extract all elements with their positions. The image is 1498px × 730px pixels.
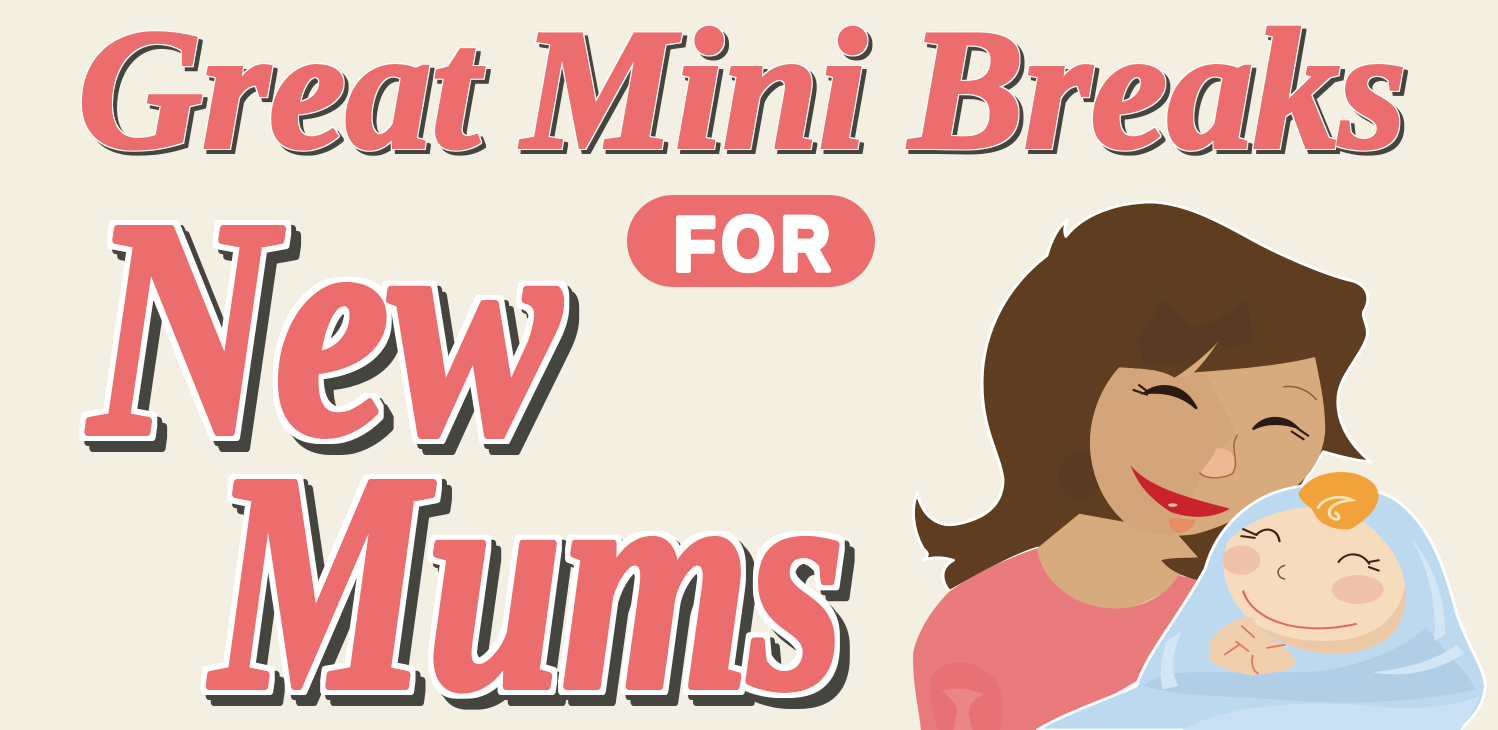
FOR pill badge: [627, 195, 875, 287]
mother's face: [1090, 342, 1325, 536]
baby's face: [1224, 507, 1406, 654]
blanket: [1037, 484, 1485, 730]
baby's cheeks: [1222, 545, 1384, 604]
blanket lower sheet: [1182, 696, 1480, 730]
title: Great Mini Breaks: Great Mini Breaks: [78, 0, 1406, 185]
blanket folds: [1144, 627, 1476, 702]
mother's sweater: [913, 548, 1201, 730]
lip shine: [1168, 503, 1177, 507]
left eye: [1133, 385, 1197, 409]
FOR pill badge: FOR: [674, 202, 830, 287]
hair shadow near cheek: [1058, 452, 1100, 500]
right eye: [1253, 418, 1309, 440]
baby's jaw shade: [1255, 586, 1406, 654]
sweater fold: [930, 662, 1003, 730]
heading: New: New: [86, 157, 561, 500]
mother's neck: [1037, 514, 1205, 608]
mother's hair: [913, 202, 1371, 591]
sweater fold highlight: [942, 689, 984, 730]
mouth: [1131, 466, 1230, 517]
baby's nose: [1278, 565, 1285, 579]
baby's hair curl: [1299, 472, 1378, 529]
baby's smile: [1243, 591, 1356, 628]
baby's hands: [1209, 617, 1297, 676]
nose: [1199, 448, 1236, 477]
eyebrow: [1283, 387, 1316, 400]
blanket hood streaks: [1161, 538, 1464, 689]
hair behind baby: [1161, 557, 1209, 581]
illustration: mother holding baby: [913, 202, 1485, 730]
sweater side shadow: [1136, 581, 1201, 672]
hair bangs shadow: [1136, 300, 1253, 362]
baby's eyes: [1241, 529, 1379, 571]
face shading: [1090, 367, 1236, 535]
chin blush: [1169, 518, 1196, 533]
